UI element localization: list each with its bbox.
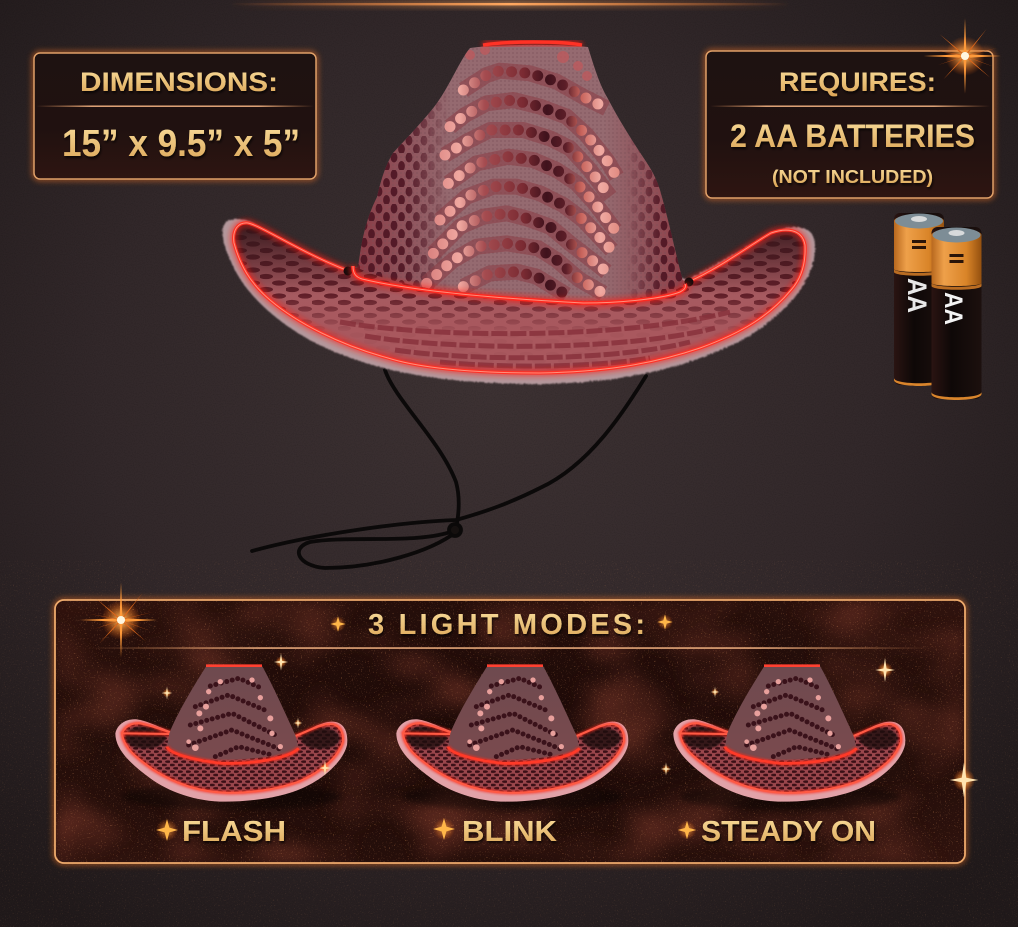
label: flash: FLASH [182, 816, 286, 848]
icon: front AA battery [932, 227, 982, 400]
hat brim fur edge [223, 219, 815, 384]
panel: batteries required [706, 51, 993, 198]
icon: back AA battery [894, 213, 944, 386]
label: blink: BLINK [462, 816, 557, 848]
decorative sparkles [162, 653, 978, 798]
dimensions heading: DIMENSIONS: [80, 67, 278, 97]
requires heading: REQUIRES: [779, 67, 936, 97]
icon: heading sparkle right [657, 614, 673, 630]
battery requirement: 2 AA BATTERIES [730, 118, 975, 154]
main hat [220, 40, 820, 385]
hat brim neon wire [234, 223, 805, 373]
icon: heading sparkle left [330, 616, 346, 632]
hat chin cord [252, 370, 646, 568]
dimensions value: 15” x 9.5” x 5” [62, 123, 300, 165]
hat: flash mode [115, 665, 347, 810]
top glow line [230, 1, 790, 7]
label: steady on: STEADY ON [701, 816, 876, 848]
icon: front AA battery: AA [939, 292, 967, 325]
hat knots [344, 266, 694, 286]
hat: blink mode [396, 665, 628, 810]
hat band neon wire [353, 266, 685, 303]
hat top neon wire [483, 42, 582, 45]
icon: sparkle on batteries panel [924, 18, 1001, 94]
hat crown [358, 44, 684, 301]
icon: back AA battery: AA [902, 278, 932, 313]
hat brim sequins [235, 224, 804, 372]
panel: dimensions [34, 53, 316, 179]
light modes heading: 3 LIGHT MODES: [368, 609, 645, 641]
not included note: (NOT INCLUDED) [772, 167, 933, 187]
panel: light modes [55, 600, 978, 863]
hat: steady on mode [673, 665, 905, 810]
icon: large sparkle on light modes panel [80, 582, 157, 658]
